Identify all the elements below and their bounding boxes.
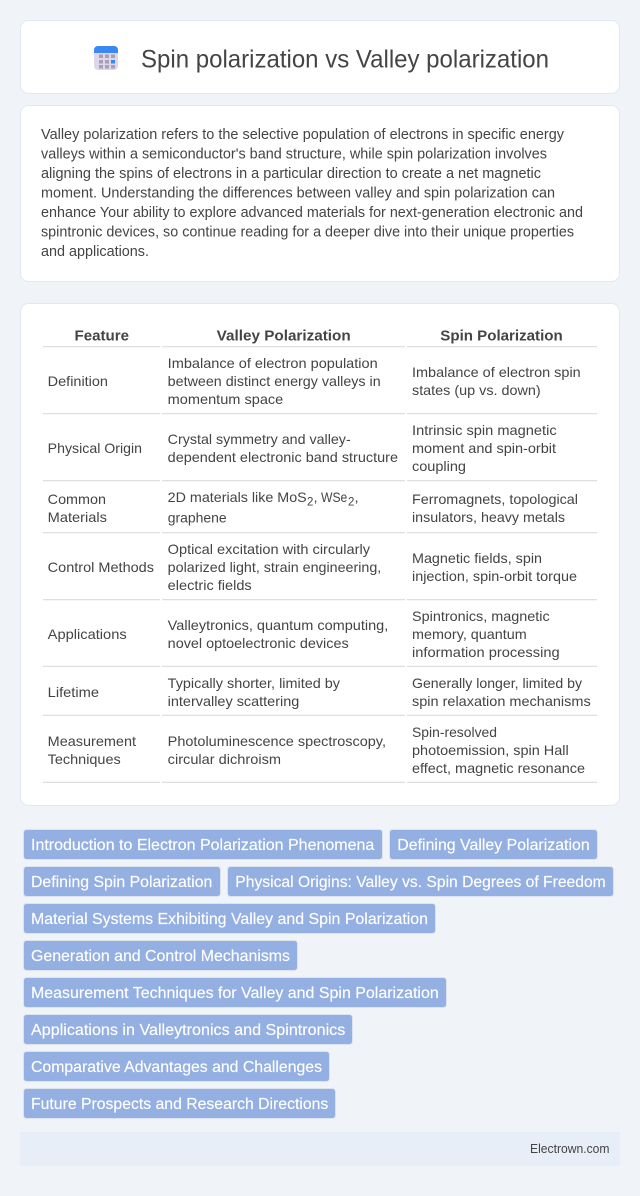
table row: Definition: Imbalance of electron population xyxy=(168,355,378,371)
table header row: Feature xyxy=(74,328,129,344)
chip: Future Prospects: Future Prospects and Research Directions xyxy=(31,1096,328,1113)
table row: Applications: memory, quantum xyxy=(412,626,527,642)
text block: intro paragraph: enhance Your ability to explore advanced materials for next-generation electronic and xyxy=(41,205,583,221)
table row: Measurement Techniques: Photoluminescence spectroscopy, xyxy=(168,733,386,749)
table row: Definition: between distinct energy valleys in xyxy=(168,373,381,389)
chip: Measurement Techniques: Measurement Techniques for Valley and Spin Polarization xyxy=(31,985,439,1002)
table row: Lifetime: intervalley scattering xyxy=(168,693,299,709)
table row: Measurement Techniques xyxy=(43,724,597,783)
table row: Applications xyxy=(43,608,597,667)
table row: Definition: states (up vs. down) xyxy=(412,382,541,398)
table row: Common Materials: , xyxy=(314,489,317,505)
table row: Definition: Definition xyxy=(48,373,108,389)
table row: Measurement Techniques: Techniques xyxy=(48,751,121,767)
table row: Control Methods: electric fields xyxy=(168,577,252,593)
table row: Common Materials: , xyxy=(355,489,358,505)
chip: Defining Spin Polarization xyxy=(24,866,220,896)
panel: comparison table xyxy=(20,304,620,806)
table row: Applications: novel optoelectronic devices xyxy=(168,635,349,651)
panel: header xyxy=(20,20,620,94)
table row: Physical Origin: coupling xyxy=(412,458,466,474)
table row: Common Materials: Ferromagnets, topological xyxy=(412,491,578,507)
footer xyxy=(20,1132,620,1166)
table row: Physical Origin: Crystal symmetry and valley- xyxy=(168,431,351,447)
table row: Physical Origin: Intrinsic spin magnetic xyxy=(412,422,557,438)
text block: intro paragraph: Valley polarization refers to the selective population of electrons in specific energy xyxy=(41,127,565,143)
table row: Physical Origin xyxy=(43,422,597,481)
panel: introduction xyxy=(20,106,620,282)
chip: Physical Origins: Physical Origins: Valley vs. Spin Degrees of Freedom xyxy=(235,874,606,891)
chip: Applications xyxy=(24,1014,352,1044)
table row: Measurement Techniques: circular dichroism xyxy=(168,751,281,767)
table row: Definition xyxy=(43,355,597,414)
chip: Defining Valley Polarization: Defining Valley Polarization xyxy=(397,837,590,854)
table row: Physical Origin: Physical Origin xyxy=(48,440,142,456)
table row: Applications: Applications xyxy=(48,626,127,642)
chip: Comparative Advantages xyxy=(24,1052,330,1082)
table row: Control Methods: Control Methods xyxy=(48,559,154,575)
text block: intro paragraph: aligning the spins of electrons in a particular direction to create a net magnetic xyxy=(41,166,541,182)
table row: Common Materials: insulators, heavy metals xyxy=(412,509,565,525)
text block: intro paragraph: spintronic devices, so continue reading for a deeper dive into their unique properties xyxy=(41,224,574,240)
table row: Common Materials: Common xyxy=(48,491,106,507)
chip: Generation and Control: Generation and Control Mechanisms xyxy=(31,948,290,965)
table row: Lifetime: Generally longer, limited by xyxy=(412,675,582,691)
table row: Measurement Techniques: Measurement xyxy=(48,733,136,749)
chip: Comparative Advantages: Comparative Advantages and Challenges xyxy=(31,1059,322,1076)
table row: Common Materials xyxy=(43,489,597,533)
table row: Applications: information processing xyxy=(412,644,560,660)
table row: Applications: Spintronics, magnetic xyxy=(412,608,550,624)
table row: Common Materials: graphene xyxy=(168,510,227,526)
chip: Future Prospects xyxy=(24,1088,336,1118)
text block: intro paragraph: valleys within a semiconductor's band structure, while spin polarization involves xyxy=(41,146,547,162)
table row: Control Methods: Magnetic fields, spin xyxy=(412,550,542,566)
chip: Applications: Applications in Valleytronics and Spintronics xyxy=(31,1022,345,1039)
chip: Measurement Techniques xyxy=(24,978,446,1008)
table row: Lifetime: Typically shorter, limited by xyxy=(168,675,340,691)
table row: Common Materials: WSe xyxy=(321,489,347,505)
chip: Physical Origins xyxy=(228,866,614,896)
table row: Common Materials: 2D materials like MoS xyxy=(168,489,307,505)
table row: Common Materials: Materials xyxy=(48,509,107,525)
footer: Electrown.com xyxy=(530,1141,610,1156)
table header row: Spin Polarization xyxy=(440,328,563,344)
chip: Introduction xyxy=(24,830,382,860)
table row: Control Methods: Optical excitation with circularly xyxy=(168,541,370,557)
text block: intro paragraph xyxy=(41,127,583,260)
table row: Physical Origin: moment and spin-orbit xyxy=(412,440,556,456)
title: Spin polarization vs Valley polarization xyxy=(141,46,549,74)
table row: Control Methods: polarized light, strain engineering, xyxy=(168,559,381,575)
table row: Definition: momentum space xyxy=(168,391,284,407)
table row: Lifetime: spin relaxation mechanisms xyxy=(412,693,591,709)
table row: Lifetime xyxy=(43,675,597,716)
table row: Measurement Techniques: Spin-resolved xyxy=(412,724,497,740)
chip: Defining Valley Polarization xyxy=(390,830,598,860)
chip: Introduction: Introduction to Electron Polarization Phenomena xyxy=(31,837,374,854)
table header row xyxy=(43,328,597,347)
table row: Common Materials: 2 xyxy=(307,497,313,509)
chip: Defining Spin Polarization: Defining Spin Polarization xyxy=(31,874,212,891)
table row: Applications: Valleytronics, quantum computing, xyxy=(168,617,388,633)
table row: Physical Origin: dependent electronic band structure xyxy=(168,449,398,465)
chip: Generation and Control xyxy=(24,940,298,970)
table header row: Valley Polarization xyxy=(217,328,351,344)
chip: Material Systems xyxy=(24,904,436,934)
text block: intro paragraph: moment. Understanding the differences between valley and spin polarization can xyxy=(41,186,555,202)
table row: Measurement Techniques: effect, magnetic resonance xyxy=(412,760,585,776)
topic chips xyxy=(24,830,614,1118)
table row: Control Methods xyxy=(43,541,597,600)
table row: Lifetime: Lifetime xyxy=(48,684,99,700)
icon: calendar xyxy=(94,46,118,70)
table row: Control Methods: injection, spin-orbit torque xyxy=(412,568,577,584)
text block: intro paragraph: and applications. xyxy=(41,244,149,260)
table row: Measurement Techniques: photoemission, spin Hall xyxy=(412,742,569,758)
chip: Material Systems: Material Systems Exhibiting Valley and Spin Polarization xyxy=(31,911,428,928)
table row: Definition: Imbalance of electron spin xyxy=(412,364,581,380)
table row: Common Materials: 2 xyxy=(348,497,354,509)
